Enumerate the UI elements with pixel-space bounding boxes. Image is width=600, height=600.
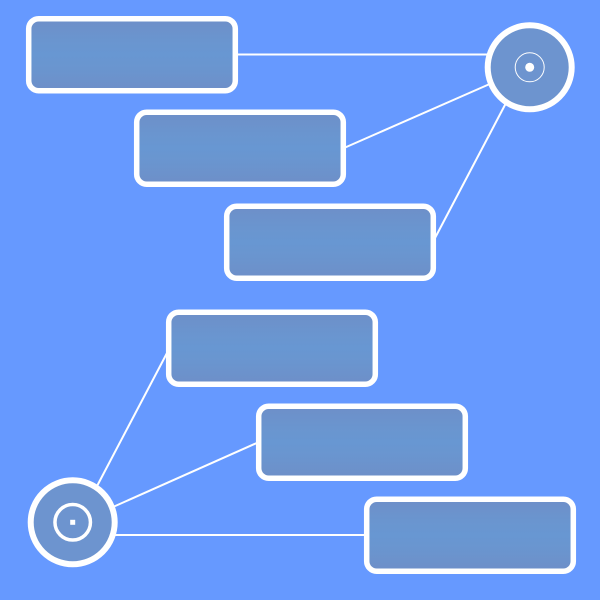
icon: top target circle bbox=[488, 25, 572, 109]
box 4 bbox=[169, 312, 375, 384]
box 1 bbox=[29, 19, 235, 91]
connectors: top group bbox=[236, 54, 506, 238]
connectors: bottom group bbox=[96, 353, 367, 535]
box 3 bbox=[227, 206, 433, 278]
icon: bottom target circle bbox=[31, 480, 115, 564]
box 5 bbox=[259, 406, 465, 478]
box 2 bbox=[137, 112, 343, 184]
box 6 bbox=[367, 499, 573, 571]
